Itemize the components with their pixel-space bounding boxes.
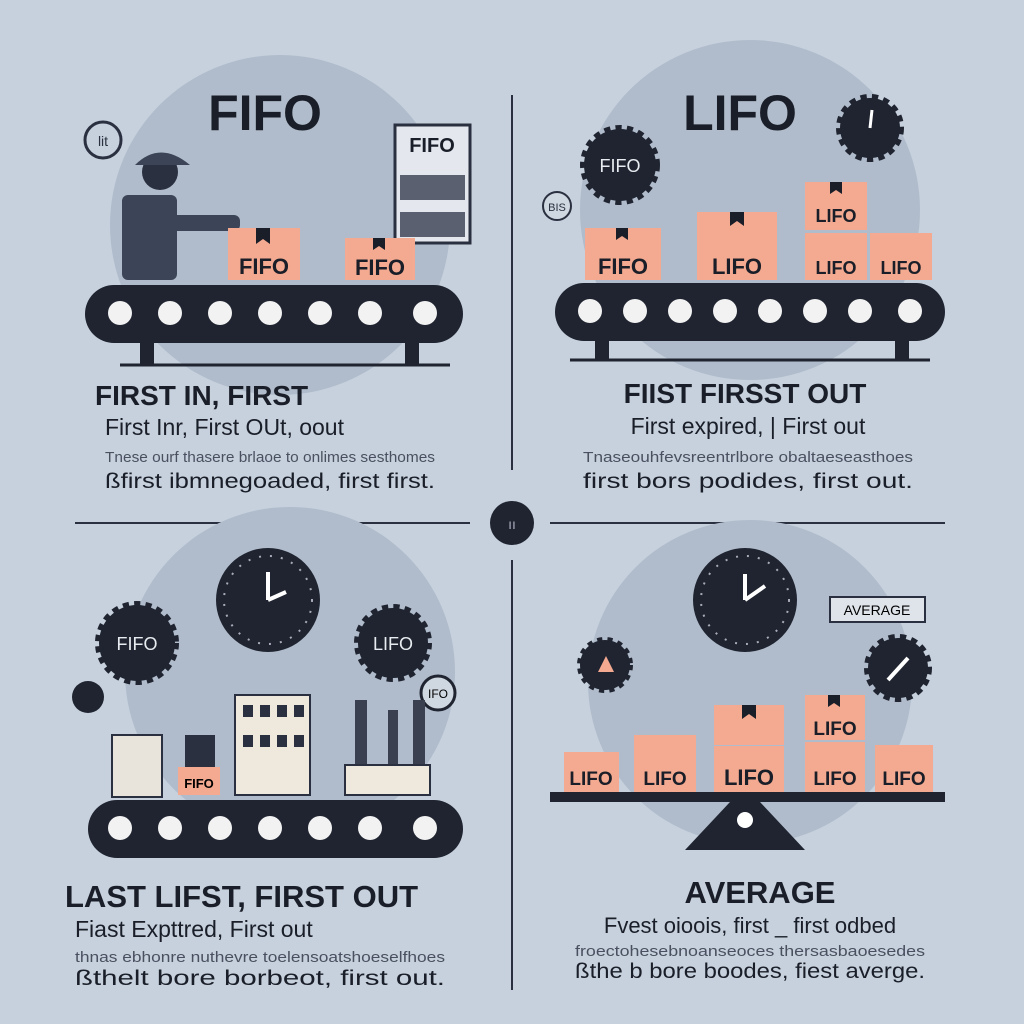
icon: gear FIFO (99, 605, 175, 681)
panel: AVERAGE: LIFO (813, 769, 857, 790)
worker (122, 152, 240, 280)
panel: LAST LIFST (65, 507, 463, 990)
panel: LIFO (543, 40, 945, 493)
boxes (585, 182, 932, 280)
text block: AVERAGE (684, 875, 836, 910)
text block: ßthe b bore boodes, fiest averge. (575, 960, 925, 983)
text block (583, 378, 913, 493)
panel: LIFO: LIFO (816, 258, 856, 278)
text block: LAST LIFST, FIRST OUT (65, 879, 418, 914)
text block (65, 879, 445, 990)
text block: First Inr, First OUt, oout (105, 414, 345, 440)
icon: gear clock (840, 98, 900, 158)
panel: LIFO: BIS (548, 202, 566, 214)
center icon (490, 501, 534, 545)
boxes (228, 228, 415, 280)
text block: First expired, | First out (631, 413, 866, 439)
panel: LIFO: LIFO (816, 206, 856, 226)
text block: froectohesebnoanseoces thersasbaoesedes (575, 943, 925, 960)
balance (550, 792, 945, 850)
boxes: FIFO (355, 255, 405, 280)
text block: FIIST FIRSST OUT (624, 378, 866, 409)
text block (575, 875, 925, 983)
panel: AVERAGE: LIFO (643, 769, 687, 790)
text block: first bors podides, first out. (583, 470, 913, 493)
conveyor (88, 800, 463, 858)
panel: AVERAGE: LIFO (813, 719, 857, 740)
text block: Tnaseouhfevsreentrlbore obaltaeseasthoes (583, 449, 913, 466)
icon: clock (216, 548, 320, 652)
icon: gear LIFO: LIFO (373, 634, 413, 654)
panel: LIFO: LIFO (712, 254, 762, 279)
boxes (564, 695, 933, 792)
boxes: FIFO (239, 254, 289, 279)
panel: FIFO (85, 55, 470, 493)
label AVERAGE: AVERAGE (844, 602, 910, 618)
icon: small badge (85, 122, 121, 158)
conveyor (555, 283, 945, 360)
text block: Fiast Expttred, First out (75, 916, 313, 942)
text block: Tnese ourf thasere brlaoe to onlimes sesthomes (105, 449, 435, 466)
panel: LIFO: LIFO (880, 258, 922, 278)
panel: AVERAGE (550, 520, 945, 983)
icon: gears (580, 638, 928, 698)
icon: gear FIFO (584, 129, 656, 201)
text block: thnas ebhonre nuthevre toelensoatshoeselfhoes (75, 949, 445, 966)
panel: AVERAGE: LIFO (882, 769, 926, 790)
panel: LIFO: FIFO (598, 254, 648, 279)
title FIFO: FIFO (208, 85, 322, 141)
text block: Fvest oioois, first _ first odbed (604, 913, 896, 938)
center icon: ıı (508, 516, 516, 532)
panel: AVERAGE: LIFO (724, 765, 774, 790)
panel: AVERAGE: LIFO (569, 769, 613, 790)
panel: LAST LIFST: IFO (428, 687, 448, 701)
title LIFO: LIFO (683, 85, 797, 141)
icon: gear FIFO: FIFO (116, 634, 158, 654)
text block: ßthelt bore borbeot, first out. (75, 967, 445, 990)
text block: FIRST IN, FIRST (95, 380, 308, 411)
shelf: FIFO (409, 135, 455, 157)
icon: gear LIFO (358, 608, 428, 678)
label AVERAGE (830, 597, 925, 622)
icon: gear FIFO: FIFO (600, 156, 640, 176)
buildings (112, 695, 430, 797)
buildings: FIFO (184, 776, 214, 791)
icon: clock (693, 548, 797, 652)
text block: ßfirst ibmnegoaded, first first. (105, 470, 435, 493)
conveyor (85, 285, 463, 365)
icon: small badge: lit (98, 133, 108, 149)
shelf (395, 125, 470, 243)
text block (95, 380, 435, 493)
